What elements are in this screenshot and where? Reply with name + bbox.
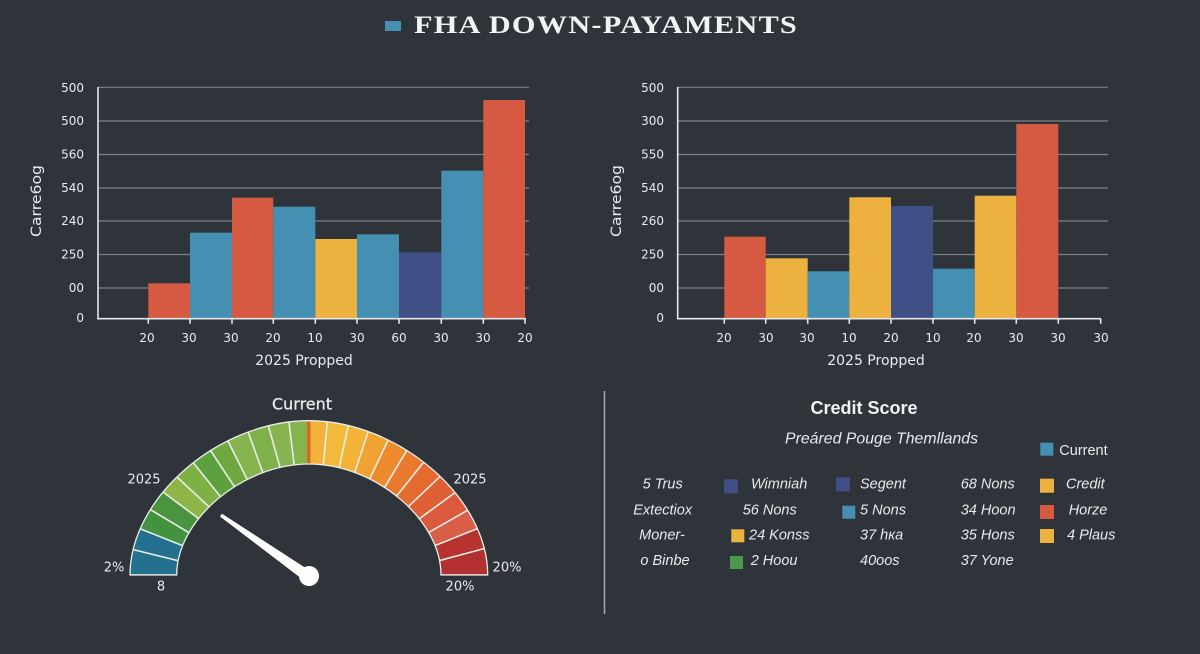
legend column 3: 40oos	[860, 553, 900, 569]
gauge title: Current	[272, 394, 332, 414]
left chart y-axis labels: 0	[76, 311, 84, 325]
legend column 4: 68 Nons	[961, 476, 1015, 492]
legend column 2: 56 Nons	[743, 502, 797, 518]
left chart x-axis labels: 30	[349, 331, 365, 345]
left chart y-axis labels: 500	[61, 81, 84, 95]
left chart y-axis labels: 540	[61, 181, 84, 195]
right chart x-axis title: 2025 Propped	[827, 353, 925, 369]
left chart x-axis labels: 20	[517, 331, 533, 345]
gauge labels: 2025	[453, 472, 487, 488]
legend column 3: 5 Nons	[860, 502, 906, 518]
right chart x-axis labels: 30	[799, 331, 815, 345]
left chart y-axis labels: 240	[61, 214, 84, 228]
icon: title marker	[385, 21, 401, 31]
right chart x-axis labels: 30	[1050, 331, 1066, 345]
panel: right bar chart	[609, 81, 1109, 369]
legend column 4: 34 Hoon	[961, 502, 1016, 518]
legend column 5	[1066, 476, 1115, 544]
left chart x-axis labels: 30	[181, 331, 197, 345]
divider	[604, 391, 606, 614]
legend column 1: 5 Trus	[643, 476, 683, 492]
left chart x-axis labels: 60	[391, 331, 407, 345]
legend subheading: Preáred Pouge Themllands	[785, 430, 978, 448]
gauge labels: 2%	[104, 560, 124, 576]
legend column 3: 37 hка	[860, 528, 903, 544]
left chart x-axis labels: 30	[433, 331, 449, 345]
title	[385, 12, 798, 39]
left chart y-axis title: Carre6og	[29, 165, 45, 237]
right chart x-axis labels: 20	[883, 331, 899, 345]
legend column 1: Extectiox	[633, 502, 693, 518]
right chart x-axis labels: 10	[841, 331, 857, 345]
left chart y-axis labels: 250	[61, 248, 84, 262]
left chart x-axis labels: 30	[223, 331, 239, 345]
panel: left bar chart	[29, 81, 533, 369]
gauge centre marker	[307, 422, 310, 464]
legend column 5: 4 Plaus	[1067, 528, 1115, 544]
left chart y-axis labels: 560	[61, 148, 84, 162]
right chart x-axis labels: 20	[966, 331, 982, 345]
right chart y-axis labels: 540	[641, 181, 664, 195]
right chart x-axis labels: 30	[1093, 331, 1109, 345]
right chart y-axis labels	[641, 81, 664, 325]
gauge labels: 20%	[446, 580, 474, 594]
left chart x-axis labels: 30	[475, 331, 491, 345]
legend column 2	[743, 476, 809, 569]
legend column 2: Wimniah	[751, 476, 807, 492]
right chart y-axis labels: 260	[641, 214, 664, 228]
legend column 2: 2 Hoou	[750, 553, 797, 569]
gauge labels	[104, 472, 521, 594]
left chart x-axis labels: 20	[139, 331, 155, 345]
legend column 1: Moner-	[639, 528, 685, 544]
legend column 5: Credit	[1066, 476, 1106, 492]
right chart x-axis labels	[716, 331, 1109, 345]
legend column 1	[633, 476, 693, 569]
right chart y-axis labels: 250	[641, 248, 664, 262]
gauge labels: 20%	[493, 560, 521, 576]
title text: FHA DOWN-PAYAMENTS	[414, 12, 798, 39]
left chart x-axis labels: 10	[307, 331, 323, 345]
right chart x-axis labels: 30	[1008, 331, 1024, 345]
legend column 4: 35 Hons	[961, 528, 1015, 544]
legend column 3	[860, 476, 907, 569]
gauge arc segments	[130, 421, 487, 574]
left chart y-axis labels: 00	[69, 281, 84, 295]
legend current label: Current	[1059, 443, 1108, 459]
panel: credit score legend	[633, 398, 1115, 569]
legend column 2: 24 Konss	[748, 528, 809, 544]
left chart x-axis labels	[139, 331, 533, 345]
left chart y-axis labels: 500	[61, 114, 84, 128]
legend column 4	[961, 476, 1016, 569]
right chart y-axis labels: 00	[649, 281, 664, 295]
legend heading: Credit Score	[810, 398, 918, 418]
gauge labels: 8	[157, 580, 165, 594]
left chart bars	[148, 100, 525, 319]
right chart y-axis labels: 0	[656, 311, 664, 325]
legend column 3: Segent	[860, 476, 907, 492]
right chart y-axis labels: 550	[641, 148, 664, 162]
right chart y-axis title: Carre6og	[609, 165, 625, 237]
gauge outline	[130, 421, 488, 575]
legend column 1: o Binbe	[640, 553, 690, 569]
legend column 5: Horze	[1069, 502, 1107, 518]
right chart y-axis labels: 500	[641, 81, 664, 95]
right chart bars	[724, 124, 1058, 319]
gauge labels: 2025	[127, 472, 161, 488]
left chart x-axis title: 2025 Propped	[255, 353, 353, 369]
left chart x-axis labels: 20	[265, 331, 281, 345]
right chart y-axis labels: 300	[641, 114, 664, 128]
left chart y-axis labels	[61, 81, 84, 325]
right chart x-axis labels: 20	[716, 331, 732, 345]
right chart x-axis labels: 30	[758, 331, 774, 345]
right chart x-axis labels: 10	[925, 331, 941, 345]
legend swatches	[724, 443, 1054, 569]
panel: gauge	[104, 394, 521, 594]
legend column 4: 37 Yone	[961, 553, 1014, 569]
gauge needle	[220, 514, 319, 586]
